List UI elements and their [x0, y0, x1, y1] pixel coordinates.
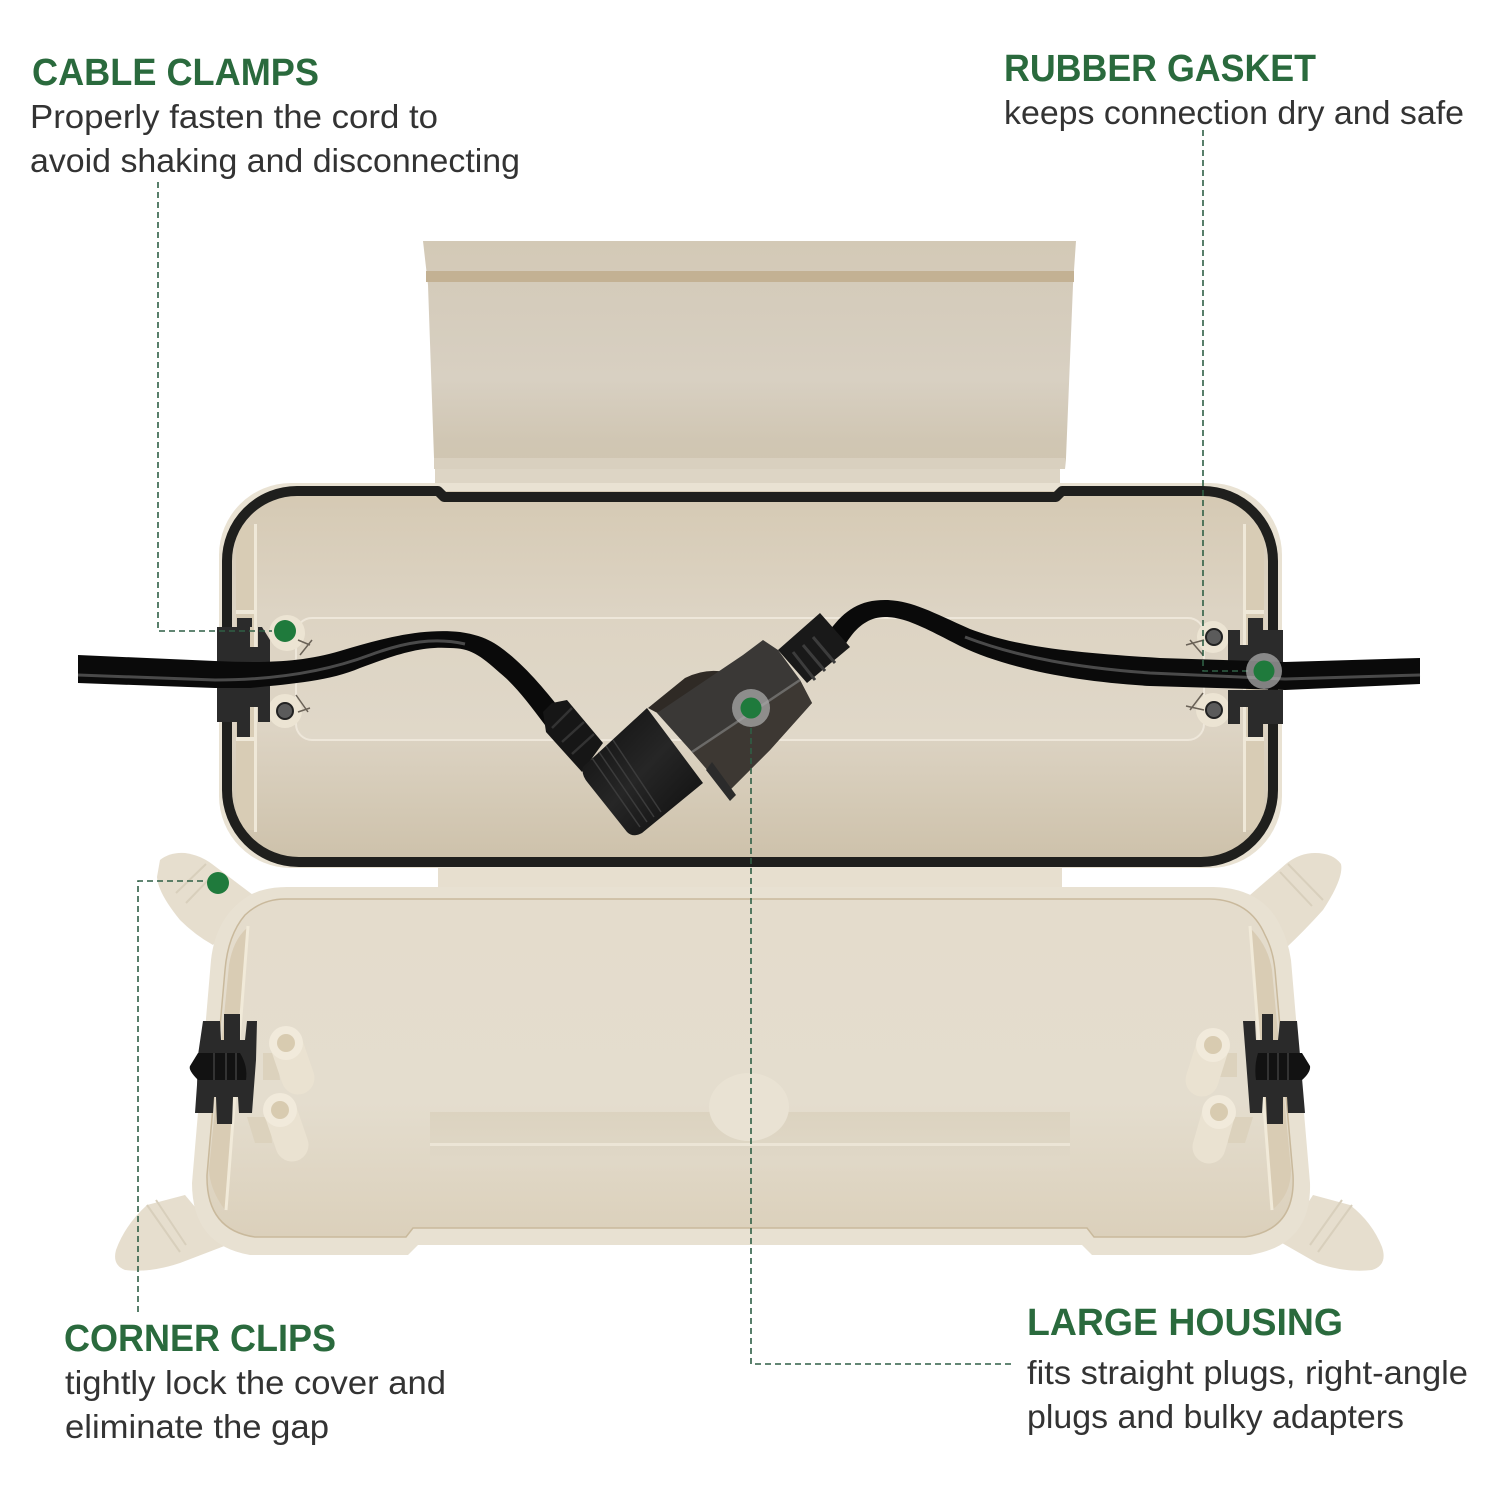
plug hump	[648, 671, 725, 725]
corner clip: top right	[1250, 853, 1341, 947]
heading: cable clamps: Properly fasten the cord to	[30, 98, 438, 135]
heading: rubber gasket: RUBBER GASKET	[1004, 48, 1316, 90]
mounting post: right lower	[1202, 1095, 1236, 1147]
side rib: right	[1243, 524, 1264, 832]
side rib: left	[236, 524, 257, 832]
rubber gasket	[227, 491, 1273, 862]
cable clamp: upper right top	[1228, 618, 1283, 664]
corner clip: top left	[157, 853, 253, 945]
heading: large housing: LARGE HOUSING	[1027, 1302, 1343, 1344]
post support fins	[247, 1053, 1253, 1143]
upper housing	[219, 483, 1282, 868]
center bump	[709, 1073, 789, 1141]
marker: cable clamps	[274, 620, 296, 642]
leader line: rubber gasket	[1203, 130, 1248, 671]
plug	[543, 613, 850, 835]
barrel ridges	[592, 740, 661, 827]
lid flap	[423, 241, 1076, 492]
cable: left	[78, 631, 565, 725]
heading: large housing: plugs and bulky adapters	[1027, 1398, 1404, 1435]
heading: cable clamps: CABLE CLAMPS	[32, 52, 319, 94]
leader line: cable clamps	[158, 182, 272, 631]
heading: cable clamps: avoid shaking and disconnecting	[30, 142, 520, 179]
heading: large housing: fits straight plugs, right-angle	[1027, 1354, 1468, 1391]
screw: left top	[269, 615, 312, 655]
heading: large housing	[1027, 1302, 1468, 1435]
marker: corner clips	[207, 872, 229, 894]
heading: corner clips: tightly lock the cover and	[65, 1364, 446, 1401]
lower clamp: left	[190, 1014, 257, 1124]
plug tab	[706, 762, 736, 801]
heading: cable clamps	[30, 52, 520, 179]
heading: corner clips: CORNER CLIPS	[64, 1318, 336, 1360]
screw: right top	[1186, 621, 1229, 655]
hinge tab	[438, 862, 1062, 892]
strain relief: right	[778, 613, 850, 683]
corner clip: bottom left	[115, 1195, 227, 1271]
cable clamp: upper left bottom	[217, 686, 270, 737]
leader line: corner clips	[138, 881, 207, 1312]
mounting post: right upper	[1196, 1028, 1230, 1080]
recessed floor panel	[430, 1112, 1070, 1172]
screw: left bottom	[268, 694, 310, 728]
heading: corner clips: eliminate the gap	[65, 1408, 329, 1445]
plug body	[657, 640, 812, 793]
heading: rubber gasket	[1004, 48, 1464, 131]
side wall: right	[1250, 928, 1291, 1210]
heading: corner clips	[64, 1318, 446, 1445]
housing interior	[207, 899, 1293, 1237]
lower housing	[190, 887, 1310, 1255]
cable: right	[830, 600, 1420, 690]
lower clamp: right	[1243, 1014, 1310, 1124]
leader line: large housing	[751, 728, 1015, 1364]
heading: rubber gasket: keeps connection dry and safe	[1004, 94, 1464, 131]
mounting post: left upper	[269, 1026, 303, 1078]
raised floor panel	[296, 618, 1204, 740]
cable clamp: upper left top	[217, 618, 270, 662]
strain relief: left	[543, 700, 603, 772]
side wall: left	[209, 928, 247, 1210]
cable clamp: upper right bottom	[1228, 690, 1283, 737]
corner clip: bottom right	[1282, 1195, 1384, 1271]
plug barrel	[583, 708, 703, 835]
mounting post: left lower	[263, 1093, 297, 1145]
marker: large housing	[732, 689, 770, 727]
screw: right bottom	[1186, 693, 1230, 727]
marker: rubber gasket	[1246, 653, 1282, 689]
